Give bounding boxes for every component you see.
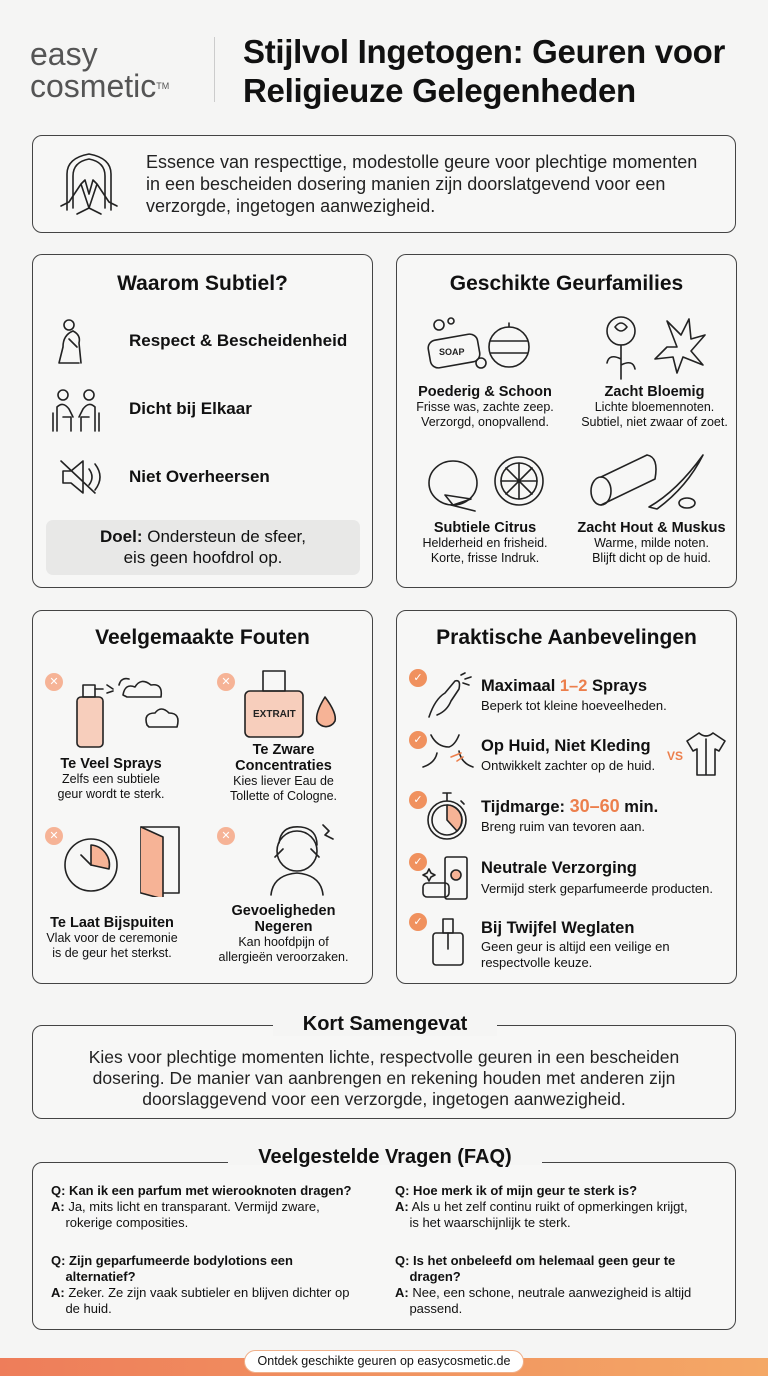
- panel: veelgemaakte fouten: allergieën veroorzaken.: [219, 950, 348, 964]
- icon: clock and door: [64, 826, 180, 897]
- footer bar: [0, 1358, 768, 1376]
- panel: kort samengevat: dosering. De manier van aanbrengen en rekening houden met anderen zijn: [93, 1068, 675, 1088]
- faq 4: [395, 1253, 691, 1316]
- panel: praktische aanbevelingen: ✓: [413, 916, 423, 928]
- panel: kort samengevat: Kies voor plechtige momenten lichte, respectvolle geuren in een bescheiden: [89, 1047, 679, 1067]
- panel: praktische aanbevelingen: Bij Twijfel Weglaten: [481, 919, 634, 937]
- panel: FAQ: [32, 1162, 736, 1330]
- panel: veelgemaakte fouten: Tollette of Cologne.: [230, 789, 337, 803]
- faq 4: A: Nee, een schone, neutrale aanwezigheid is altijd: [395, 1285, 691, 1300]
- panel: geurfamilies: Zacht Hout & Muskus: [577, 520, 726, 536]
- icon: plain bottle: [432, 918, 464, 966]
- panel: veelgemaakte fouten: [32, 610, 373, 984]
- panel: geurfamilies: Frisse was, zachte zeep.: [416, 400, 554, 414]
- icon: wood and vanilla: [590, 454, 704, 510]
- panel: waarom subtiel: Respect & Bescheidenheid: [129, 331, 347, 350]
- panel: waarom subtiel: Waarom Subtiel?: [117, 272, 288, 295]
- panel: kort samengevat: [32, 1025, 736, 1119]
- panel: veelgemaakte fouten: ✕: [221, 676, 231, 688]
- faq 1: [51, 1183, 352, 1230]
- icon: muted speaker: [60, 460, 101, 494]
- icon: neck: [422, 734, 474, 768]
- panel: veelgemaakte fouten: Te Veel Sprays: [60, 756, 162, 772]
- panel: praktische aanbevelingen: Geen geur is altijd een veilige en: [481, 939, 670, 954]
- panel: geurfamilies: Subtiele Citrus: [434, 520, 536, 536]
- icon: spray bottle with clouds: [76, 678, 179, 748]
- footer pill: Ontdek geschikte geuren op easycosmetic.de: [258, 1354, 510, 1368]
- panel: geurfamilies: [396, 254, 737, 588]
- panel: veelgemaakte fouten: geur wordt te sterk.: [58, 787, 164, 801]
- icon: two people sitting: [52, 389, 100, 432]
- panel: praktische aanbevelingen: Ontwikkelt zachter op de huid.: [481, 758, 655, 773]
- icon: soap: [427, 317, 530, 369]
- panel: veelgemaakte fouten: Negeren: [254, 919, 313, 935]
- icon: extrait bottle: [244, 670, 336, 738]
- panel: waarom subtiel: Dicht bij Elkaar: [129, 399, 252, 418]
- panel: veelgemaakte fouten: Veelgemaakte Fouten: [95, 626, 310, 649]
- faq 2: is het waarschijnlijk te sterk.: [409, 1215, 571, 1230]
- faq 4: Q: Is het onbeleefd om helemaal geen geur te: [395, 1253, 675, 1268]
- panel: praktische aanbevelingen: [396, 610, 737, 984]
- icon: rose and lily: [606, 316, 706, 380]
- title: [243, 33, 725, 109]
- faq 1: A: Ja, mits licht en transparant. Vermijd zware,: [51, 1199, 320, 1214]
- panel: praktische aanbevelingen: ✓: [413, 734, 423, 746]
- faq 3: de huid.: [65, 1301, 112, 1316]
- panel: praktische aanbevelingen: Beperk tot kleine hoeveelheden.: [481, 698, 667, 713]
- panel: waarom subtiel: Niet Overheersen: [129, 467, 270, 486]
- panel: waarom subtiel: [32, 254, 373, 588]
- faq 3: [51, 1253, 349, 1316]
- panel: geurfamilies: Lichte bloemennoten.: [595, 400, 714, 414]
- panel: praktische aanbevelingen: VS: [667, 749, 683, 763]
- callout: doel: Doel: Ondersteun de sfeer,: [100, 527, 306, 546]
- logo: cosmeticTM: [30, 68, 169, 104]
- callout: doel: eis geen hoofdrol op.: [124, 548, 282, 567]
- panel: geurfamilies: Blijft dicht op de huid.: [592, 551, 711, 565]
- icon: citrus: [428, 456, 544, 512]
- callout: doel: [46, 520, 360, 575]
- panel: praktische aanbevelingen: respectvolle keuze.: [481, 955, 592, 970]
- panel: veelgemaakte fouten: ✕: [49, 830, 59, 842]
- panel: veelgemaakte fouten: ✕: [221, 830, 231, 842]
- faq 3: alternatief?: [65, 1269, 136, 1284]
- icon: stopwatch: [427, 792, 467, 840]
- icon: soap: SOAP: [439, 347, 465, 357]
- text: Veelgestelde Vragen (FAQ): [258, 1146, 512, 1168]
- faq 2: [395, 1183, 688, 1230]
- panel: geurfamilies: Zacht Bloemig: [605, 384, 704, 400]
- panel: veelgemaakte fouten: Te Laat Bijspuiten: [50, 915, 174, 931]
- faq 1: Q: Kan ik een parfum met wierooknoten dragen?: [51, 1183, 352, 1198]
- icon: praying hands: [60, 153, 118, 215]
- panel: geurfamilies: Verzorgd, onopvallend.: [421, 415, 549, 429]
- faq 1: rokerige composities.: [65, 1215, 188, 1230]
- icon: care products: [422, 856, 468, 900]
- panel: praktische aanbevelingen: ✓: [413, 672, 423, 684]
- text: Kort Samengevat: [303, 1013, 467, 1035]
- panel: veelgemaakte fouten: Zelfs een subtiele: [62, 772, 160, 786]
- panel: praktische aanbevelingen: Praktische Aanbevelingen: [436, 626, 697, 649]
- icon: extrait bottle: EXTRAIT: [253, 709, 296, 720]
- panel: veelgemaakte fouten: Kan hoofdpijn of: [238, 935, 329, 949]
- icon: headache: [270, 824, 334, 896]
- faq 2: A: Als u het zelf continu ruikt of opmerkingen krijgt,: [395, 1199, 688, 1214]
- panel: praktische aanbevelingen: Op Huid, Niet Kleding: [481, 737, 651, 755]
- panel: kort samengevat: doorslaggevend voor een verzorgde, ingetogen aanwezigheid.: [142, 1089, 626, 1109]
- panel: geurfamilies: Helderheid en frisheid.: [422, 536, 548, 550]
- title: Religieuze Gelegenheden: [243, 72, 636, 109]
- logo: [30, 36, 169, 104]
- faq 4: dragen?: [409, 1269, 461, 1284]
- panel: veelgemaakte fouten: Concentraties: [235, 758, 332, 774]
- panel: praktische aanbevelingen: Breng ruim van tevoren aan.: [481, 819, 645, 834]
- panel: geurfamilies: Poederig & Schoon: [418, 384, 552, 400]
- panel: geurfamilies: Korte, frisse Indruk.: [431, 551, 539, 565]
- intro text: verzorgde, ingetogen aanwezigheid.: [146, 196, 435, 216]
- faq 3: Q: Zijn geparfumeerde bodylotions een: [51, 1253, 293, 1268]
- icon: shirt: [686, 732, 726, 776]
- icon: bowing person: [58, 319, 82, 364]
- intro text: in een bescheiden dosering manien zijn doorslatgevend voor een: [146, 174, 665, 194]
- panel: veelgemaakte fouten: Vlak voor de ceremonie: [46, 931, 178, 945]
- panel: praktische aanbevelingen: Tijdmarge: 30–60 min.: [481, 796, 658, 816]
- panel: veelgemaakte fouten: Kies liever Eau de: [233, 774, 334, 788]
- intro box: [32, 135, 736, 233]
- intro text: [146, 152, 697, 216]
- logo: easy: [30, 36, 98, 72]
- faq 3: A: Zeker. Ze zijn vaak subtieler en blijven dichter op: [51, 1285, 349, 1300]
- panel: veelgemaakte fouten: ✕: [49, 676, 59, 688]
- panel: geurfamilies: Warme, milde noten.: [594, 536, 709, 550]
- panel: geurfamilies: Geschikte Geurfamilies: [450, 272, 683, 295]
- intro text: Essence van respecttige, modestolle geure voor plechtige momenten: [146, 152, 697, 172]
- panel: veelgemaakte fouten: Gevoeligheden: [232, 903, 335, 919]
- faq 4: passend.: [409, 1301, 462, 1316]
- panel: praktische aanbevelingen: Maximaal 1–2 Sprays: [481, 677, 647, 695]
- panel: praktische aanbevelingen: ✓: [413, 794, 423, 806]
- panel: veelgemaakte fouten: is de geur het sterkst.: [52, 946, 172, 960]
- panel: veelgemaakte fouten: Te Zware: [253, 742, 314, 758]
- panel: praktische aanbevelingen: ✓: [413, 856, 423, 868]
- panel: praktische aanbevelingen: Neutrale Verzorging: [481, 859, 637, 877]
- footer pill: [244, 1350, 524, 1373]
- icon: hand spray: [428, 672, 472, 718]
- panel: praktische aanbevelingen: Vermijd sterk geparfumeerde producten.: [481, 881, 713, 896]
- panel: geurfamilies: Subtiel, niet zwaar of zoet.: [581, 415, 728, 429]
- title: Stijlvol Ingetogen: Geuren voor: [243, 33, 725, 70]
- faq 2: Q: Hoe merk ik of mijn geur te sterk is?: [395, 1183, 637, 1198]
